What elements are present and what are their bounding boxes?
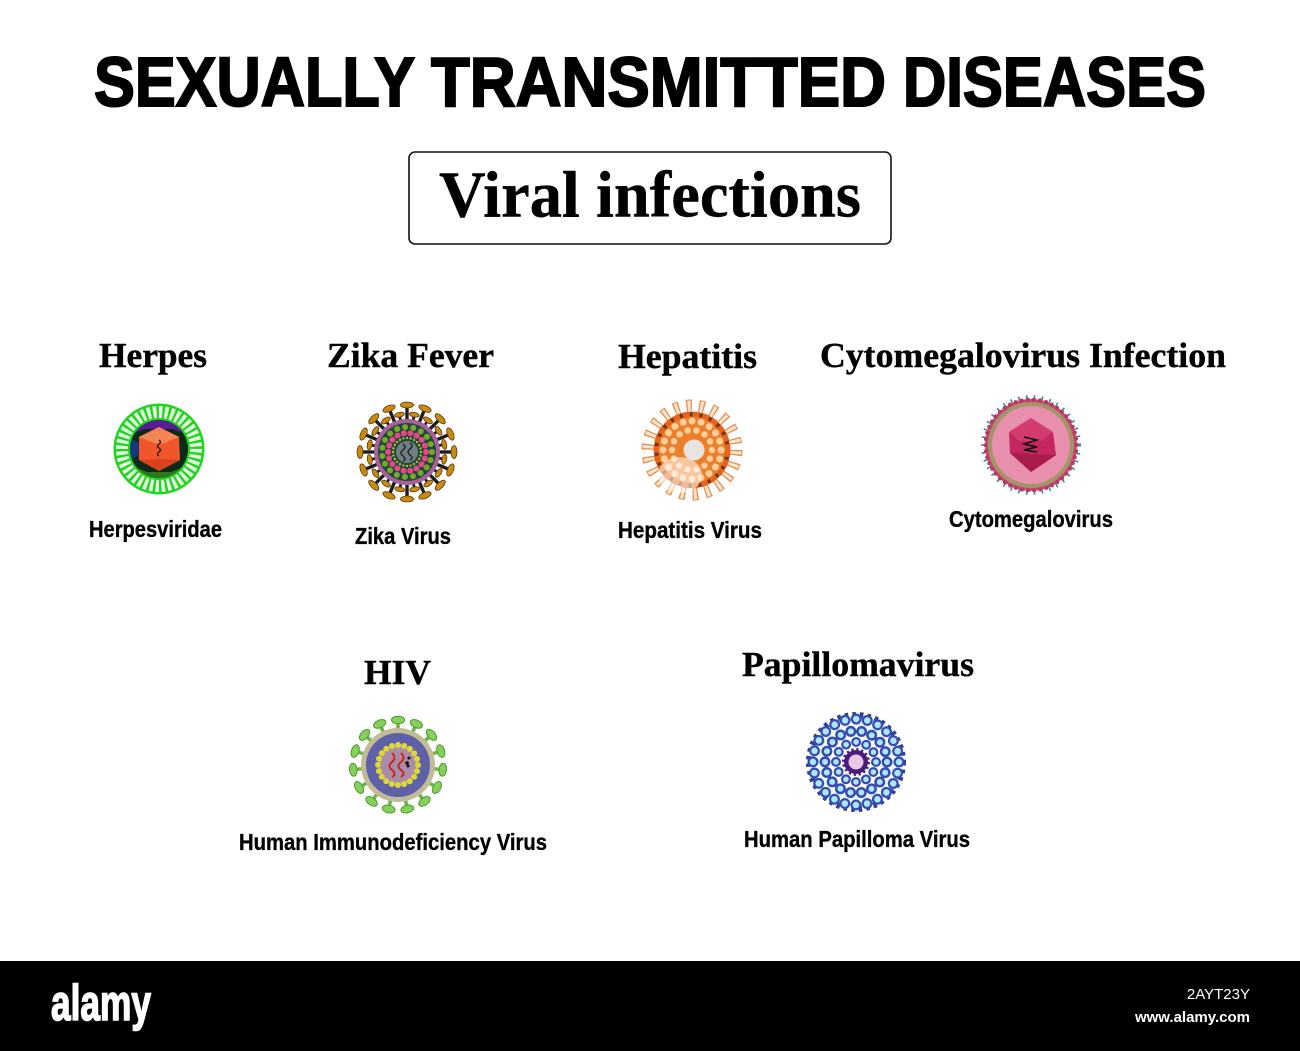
panel: cytomegalovirus <box>820 336 1226 532</box>
icon: zika virus <box>357 402 457 502</box>
caption: hiv virus: Human Immunodeficiency Virus <box>239 829 547 855</box>
caption: cytomegalovirus: Cytomegalovirus <box>949 506 1113 532</box>
icon: human papilloma virus <box>809 715 903 809</box>
icon: hepatitis virus <box>649 407 735 493</box>
icon: cytomegalovirus <box>984 398 1078 492</box>
panel: hepatitis <box>618 337 762 543</box>
panel: zika fever <box>327 336 494 549</box>
panel: papillomavirus <box>742 645 974 852</box>
caption: hepatitis virus: Hepatitis Virus <box>618 517 762 543</box>
title: DISEASES <box>903 43 1206 121</box>
logo: alamy: alamy <box>51 975 151 1031</box>
caption: human papilloma virus: Human Papilloma Virus <box>744 826 970 852</box>
heading: hiv: HIV <box>364 653 431 692</box>
icon: hiv virus <box>349 716 447 814</box>
panel: hiv <box>239 653 547 855</box>
heading: herpes: Herpes <box>99 336 207 375</box>
icon: herpes virus <box>122 412 196 486</box>
caption: herpes: Herpesviridae <box>89 516 222 542</box>
title: SEXUALLY <box>94 43 415 121</box>
heading: papillomavirus: Papillomavirus <box>742 645 974 684</box>
subtitle box: Viral infections <box>439 158 861 232</box>
panel: herpes <box>89 336 222 542</box>
heading: cytomegalovirus infection: Cytomegalovirus Infection <box>820 336 1226 375</box>
website: www.alamy.com <box>1134 1009 1250 1026</box>
image id: 2AYT23Y <box>1187 986 1250 1003</box>
heading: zika fever: Zika Fever <box>327 336 494 375</box>
footer bar <box>0 961 1300 1051</box>
title <box>94 43 1206 121</box>
caption: zika virus: Zika Virus <box>355 523 451 549</box>
heading: hepatitis: Hepatitis <box>618 337 757 376</box>
title: TRANSMITTED <box>431 43 886 121</box>
